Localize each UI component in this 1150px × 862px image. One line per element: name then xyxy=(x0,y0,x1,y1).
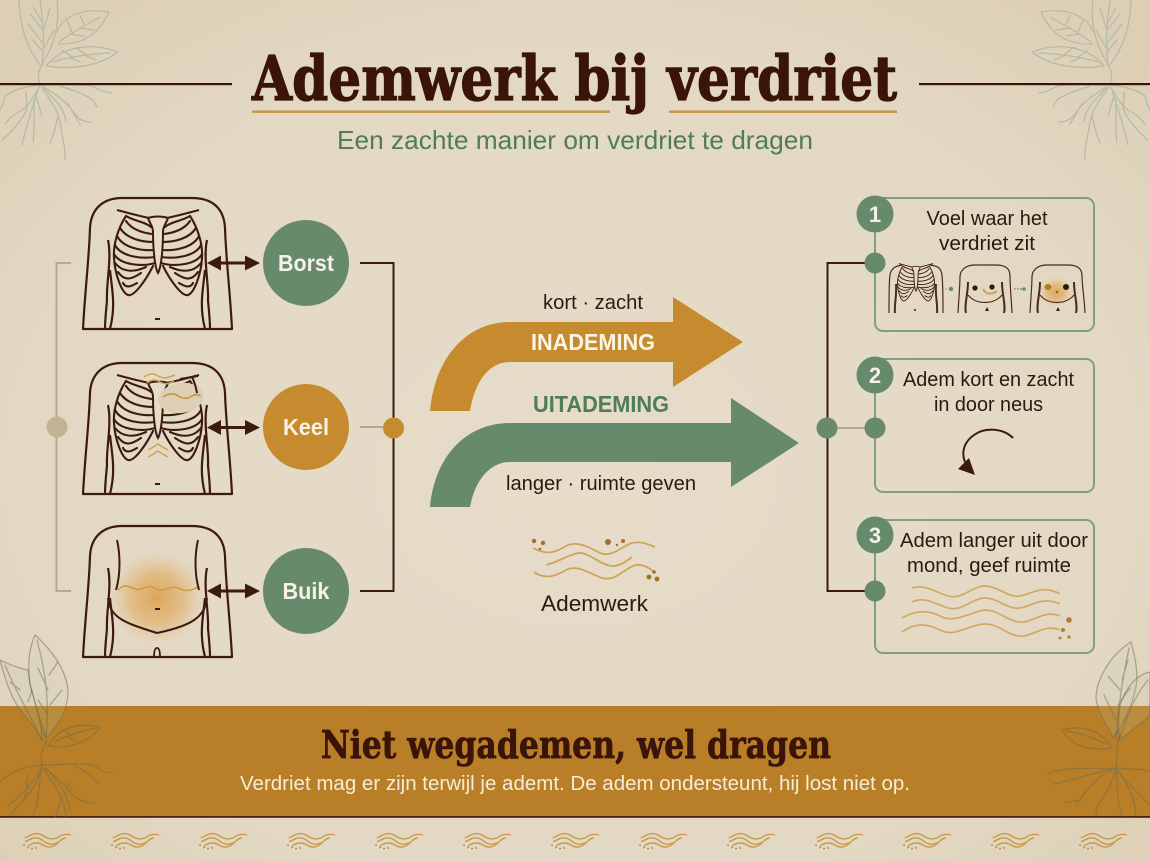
text stap 3: mond, geef ruimte xyxy=(907,555,1071,577)
banner xyxy=(0,706,1150,818)
left bracket xyxy=(46,263,71,591)
arrow: keel xyxy=(207,420,260,435)
node: Borst xyxy=(263,220,349,306)
node: Borst: Borst xyxy=(278,250,334,276)
icon: long breath waves xyxy=(902,586,1072,639)
node: Buik xyxy=(263,548,349,634)
torso: buik xyxy=(83,526,232,657)
title: Ademwerk bij verdriet xyxy=(251,42,897,115)
label: langer ruimte geven: langer · ruimte geven xyxy=(506,473,696,495)
banner text: Verdriet mag er zijn terwijl je ademt. De adem ondersteunt, hij lost niet op. xyxy=(240,773,910,795)
arrow: uitademing xyxy=(430,398,799,507)
text stap 2: Adem kort en zacht xyxy=(903,369,1074,391)
banner heading: Niet wegademen, wel dragen xyxy=(321,722,831,767)
badge 1: 1 xyxy=(869,202,881,227)
text stap 3 xyxy=(900,530,1088,577)
text stap 1: verdriet zit xyxy=(939,233,1035,255)
label: inademing: INADEMING xyxy=(531,329,655,355)
wave border xyxy=(23,834,1127,849)
node: Keel xyxy=(263,384,349,470)
text stap 2 xyxy=(903,369,1074,416)
panel: stap 3 xyxy=(856,516,1094,653)
label: ademwerk: Ademwerk xyxy=(541,591,649,616)
text stap 2: in door neus xyxy=(934,394,1043,416)
panel: stap 2 xyxy=(856,356,1094,492)
right connector xyxy=(816,263,875,591)
mini torso 3 xyxy=(1030,265,1085,313)
text stap 1 xyxy=(926,208,1048,255)
mini torso 1 xyxy=(889,264,943,313)
subtitle: Een zachte manier om verdriet te dragen xyxy=(337,125,813,155)
badge 3 xyxy=(856,516,894,554)
torso: keel xyxy=(83,363,232,494)
node: Buik: Buik xyxy=(282,578,330,604)
panel: body column xyxy=(83,198,232,657)
plant decoration: bottom right xyxy=(1047,642,1150,816)
plant decoration: top left xyxy=(0,0,118,160)
icon: curved arrow xyxy=(958,430,1013,475)
badge 3: 3 xyxy=(869,523,881,548)
title rule right xyxy=(919,83,1150,85)
badge 2: 2 xyxy=(869,363,881,388)
node: Keel: Keel xyxy=(283,414,329,440)
icon: ademwerk waves xyxy=(532,539,659,581)
panel: stap 1 xyxy=(856,196,1094,331)
arrow: borst xyxy=(207,256,260,270)
label: uitademing: UITADEMING xyxy=(533,391,669,417)
arrow: buik xyxy=(207,584,260,598)
title rule left xyxy=(0,83,232,85)
plant decoration: bottom left xyxy=(0,635,112,817)
badge 2 xyxy=(856,356,894,394)
text stap 1: Voel waar het xyxy=(926,208,1048,230)
mini torso 2 xyxy=(958,265,1012,313)
torso: borst xyxy=(83,198,232,329)
badge 1 xyxy=(856,196,894,232)
label: kort zacht: kort · zacht xyxy=(543,292,643,314)
plant decoration: top right xyxy=(1032,0,1150,160)
mini bodies xyxy=(889,264,1085,313)
arrow: inademing xyxy=(430,297,743,411)
text stap 3: Adem langer uit door xyxy=(900,530,1088,552)
right bracket of body column xyxy=(360,263,404,591)
